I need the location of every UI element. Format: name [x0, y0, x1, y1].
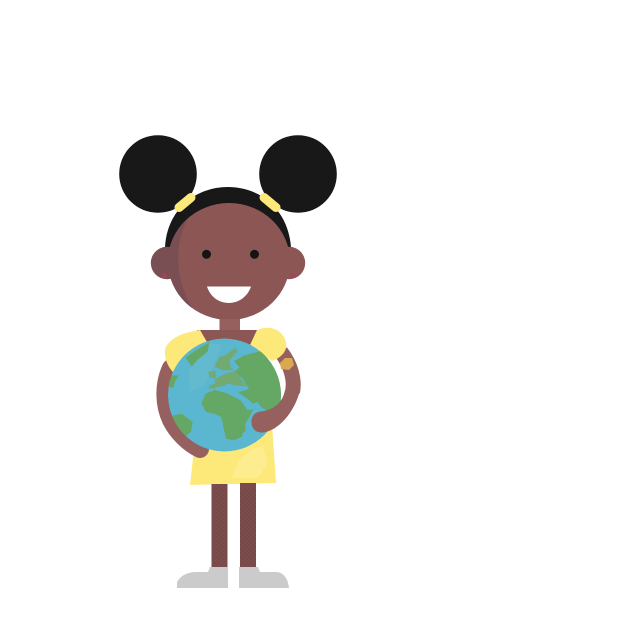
left leg: [212, 484, 228, 568]
africa: [201, 390, 253, 440]
iberia: [209, 384, 216, 389]
sleeve: left: [165, 330, 207, 372]
right forearm and hand: [251, 390, 300, 433]
scandinavia: [214, 348, 238, 370]
left arm: [165, 368, 200, 449]
dress skirt: [190, 425, 276, 485]
hair tie: right: [264, 198, 276, 208]
illustration: girl holding a globe: [119, 135, 337, 588]
asia: [234, 351, 281, 410]
britain: [208, 370, 216, 378]
hair cap: [165, 187, 291, 247]
madagascar: [242, 424, 246, 433]
ocean: [168, 338, 281, 452]
chest: [197, 330, 259, 352]
mouth: [207, 286, 251, 303]
skin patch on arm: [280, 358, 294, 370]
europe: [214, 371, 247, 387]
left shoe: [177, 567, 228, 588]
ocean light patch: [188, 342, 222, 392]
right arm upper: [281, 352, 293, 392]
head: [170, 203, 288, 320]
dress texture: [232, 446, 268, 478]
north america edge: [168, 375, 179, 388]
hair tie: left: [179, 198, 191, 208]
ear: left: [151, 247, 183, 279]
globe: [168, 338, 290, 452]
eye: left: [202, 250, 211, 259]
neck: [220, 319, 240, 333]
ear: right: [273, 247, 305, 279]
land masses: [168, 342, 290, 440]
hair puff: right: [259, 135, 337, 213]
south america: [172, 414, 193, 437]
right leg: [240, 483, 256, 568]
eye: right: [250, 250, 259, 259]
hair puff: left: [119, 135, 197, 213]
sleeve: right: [250, 328, 286, 361]
greenland: [186, 342, 209, 367]
right shoe: [239, 567, 289, 588]
